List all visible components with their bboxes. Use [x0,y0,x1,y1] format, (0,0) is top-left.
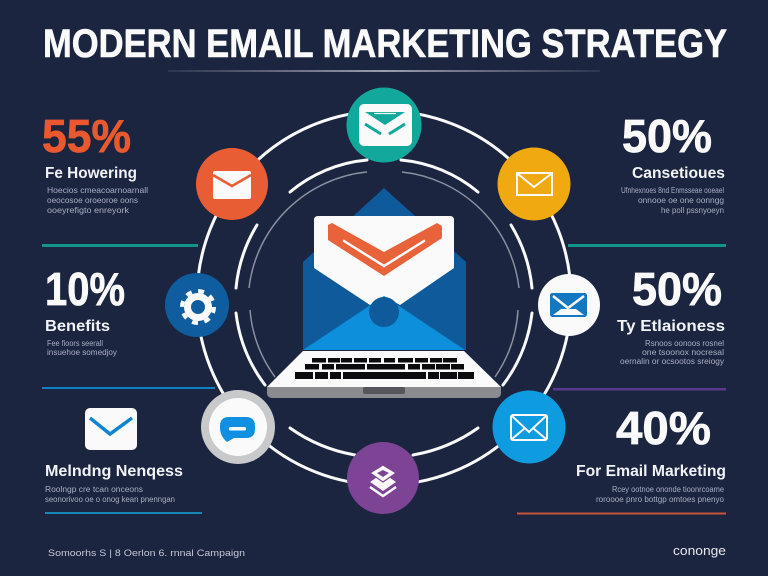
icon: yellow envelope [498,148,570,220]
stat heading: Cansetioues [632,165,725,182]
icon: teal envelope [346,88,422,162]
stat description: insuehoe somedjoy [47,348,117,357]
panel: 40% stat [517,402,726,514]
icon: purple layers [347,442,419,514]
letter chevron [328,223,442,276]
footer text: Somoorhs S | 8 Oerlon 6. rnnal Campaign [48,548,245,559]
stat heading: Melndng Nenqess [45,463,183,480]
brand mark: cononge [673,543,726,558]
stat number: 55% [42,110,131,162]
stat heading: Fe Howering [45,165,137,182]
stat description [45,485,175,504]
stat description: Hoecios cmeacoarnoarnall [47,186,148,195]
stat description: Ufnhexnoes 8nd Enmsseae ooeael [621,186,724,195]
central illustration: envelope on laptop [267,188,501,398]
icon: white envelope [538,274,600,336]
stat description: Fee fioors seerall [47,339,103,348]
stat number: 40% [616,402,711,454]
stat description [596,485,725,504]
stat description: oeocosoe oroeoroe oons [47,196,138,205]
stat number: 50% [622,110,712,162]
icon: blue envelope [492,390,566,464]
stat description: Rsnoos oonoos rosnel [645,339,724,348]
panel: 10% stat [42,263,215,389]
stat description: Roolngp cre tcan onceons [45,485,143,494]
icon: chat bubble [201,390,275,464]
icon: orange envelope [196,148,268,220]
stat description [620,339,724,366]
panel: 50% stat middle right [553,263,726,390]
panel: 50% stat top right [568,110,726,247]
stat description: seonorivoo oe o onog kean pnenngan [45,495,175,504]
panel: messaging [45,408,202,514]
panel: 55% stat [42,110,198,247]
stat number: 10% [45,263,125,315]
stat description: ooeyrefigto enreyork [47,206,130,215]
laptop [267,351,501,398]
stat heading: For Email Marketing [576,463,726,480]
stat description [47,186,148,215]
stat number: 50% [632,263,722,315]
stat description: oernalin or ocsootos sreiogy [620,357,724,366]
stat description: roroooe pnro bottgp omtoes pnenyo [596,495,725,504]
stat heading: Benefits [45,318,110,335]
icon: envelope card [85,408,137,450]
envelope [303,188,466,350]
stat description: one tsoonox nocresal [642,348,724,357]
stat description: onnooe oe one oonngg [638,196,724,205]
stat description: Rcey ootnoe ononde tioonrcoame [612,485,725,494]
diagram rings [197,111,571,485]
stat heading: Ty Etlaioness [617,318,725,335]
stat description [47,339,117,357]
stat description [621,186,724,215]
icon: gear [165,273,229,337]
letter sheet [314,216,454,305]
stat description: he poll pssnyoeyn [661,206,724,215]
